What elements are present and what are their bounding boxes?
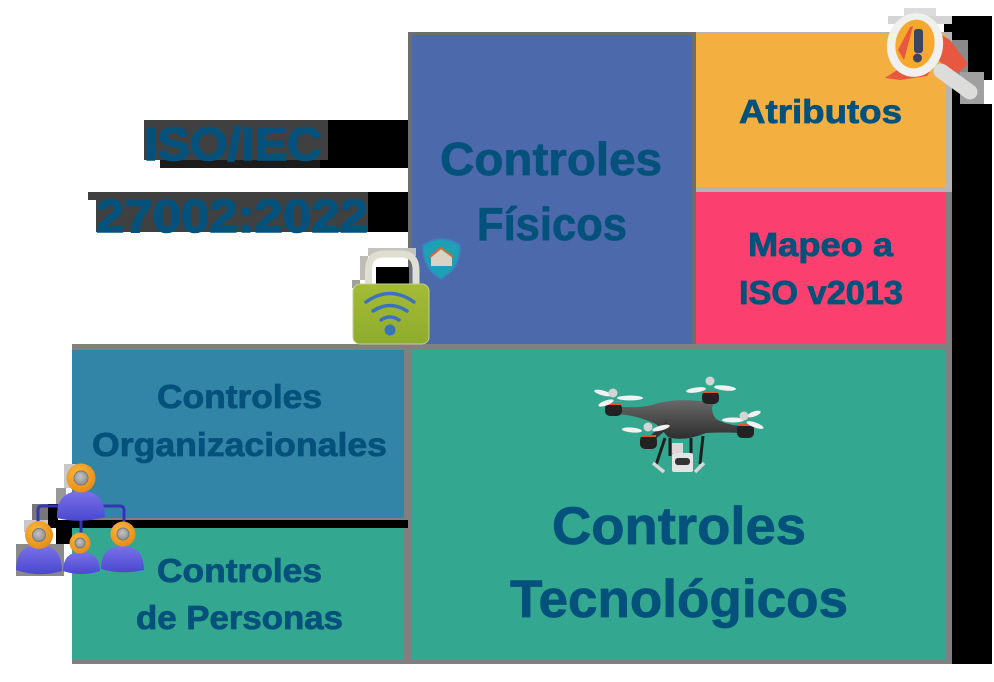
panel: atributos: Atributos	[739, 93, 902, 130]
panel: controles organizacionales	[72, 344, 408, 520]
panel: controles de personas: Controles	[157, 552, 322, 589]
icon: magnifier with warning	[882, 8, 984, 104]
panel: controles organizacionales: Controles	[157, 378, 322, 415]
drone landing gear	[656, 436, 703, 465]
icon: people hierarchy	[16, 464, 144, 576]
icon: wifi padlock	[352, 248, 429, 344]
panel: controles tecnológicos	[408, 344, 952, 664]
drone camera	[672, 443, 693, 472]
icon: home shield	[423, 239, 460, 279]
title: 27002:2022	[96, 190, 368, 242]
panel: mapeo a ISO v2013: ISO v2013	[739, 274, 903, 311]
panel: controles de personas: de Personas	[136, 599, 343, 636]
panel: controles físicos: Físicos	[477, 198, 627, 250]
icon: drone	[594, 376, 764, 472]
drone rotors	[594, 376, 764, 449]
panel: mapeo a ISO v2013	[696, 192, 952, 344]
panel: controles tecnológicos: Controles	[552, 497, 806, 556]
panel: atributos	[696, 32, 952, 192]
title: ISO/IEC	[144, 118, 322, 170]
title	[88, 118, 408, 242]
panel: controles tecnológicos: Tecnológicos	[510, 570, 848, 629]
panel: controles organizacionales: Organizacionales	[92, 426, 387, 463]
drone feet	[653, 463, 704, 472]
panel: controles de personas	[72, 528, 408, 664]
drone body and arms	[614, 396, 742, 439]
drone front arm	[650, 424, 668, 440]
panel: controles físicos	[408, 32, 696, 344]
panel: controles físicos: Controles	[440, 133, 662, 185]
panel: mapeo a ISO v2013: Mapeo a	[748, 226, 894, 263]
black gap between panels	[72, 520, 408, 528]
